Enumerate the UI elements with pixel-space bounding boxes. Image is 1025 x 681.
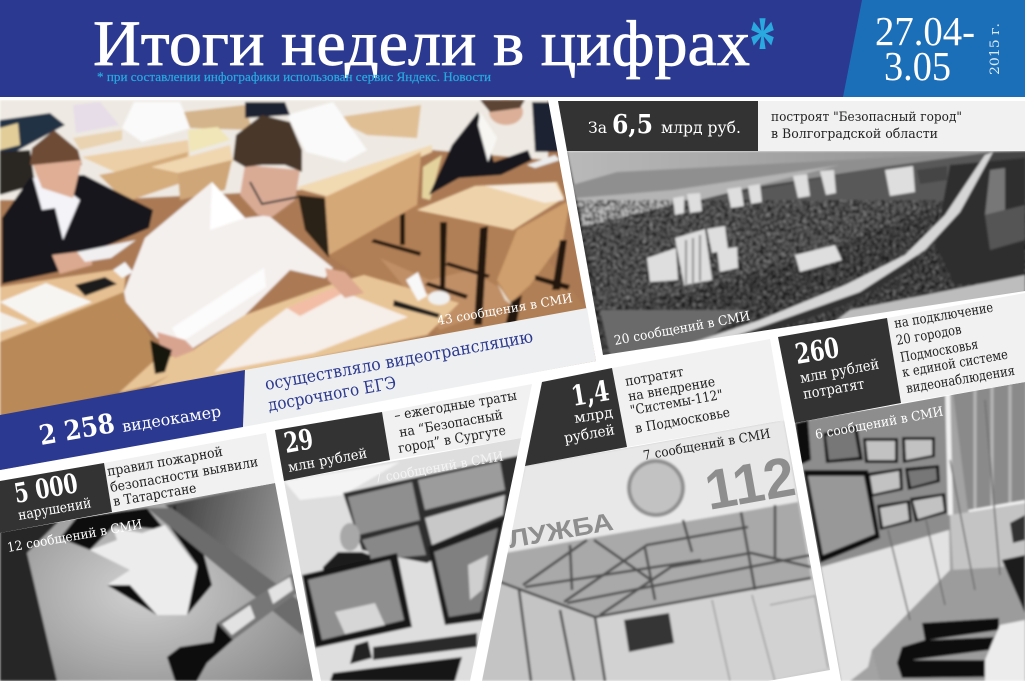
Tatarstan description: правил пожарной [106,444,224,480]
panel: exam photo [0,99,600,475]
floor [518,270,566,300]
left student [2,175,153,284]
Surgut description: на “Безопасный [398,407,504,441]
System 112 description: в Подмосковье [634,405,731,437]
stat: 6.5 billion: За [588,118,607,137]
panel: System 112 [480,339,840,681]
Volgograd description: построят "Безопасный город" [771,110,962,125]
date range: 3.05 [884,43,951,89]
band description: досрочного ЕГЭ [266,373,398,416]
panel: blue stat band [0,308,596,470]
stat: 5000 violations: нарушений [17,495,93,524]
city photo [560,151,1025,361]
Surgut description: город” в Сургуте [397,423,507,457]
title asterisk: * [749,0,776,90]
stat: 29 million [281,422,368,476]
Tatarstan description: в Татарстане [112,480,198,510]
label on photo: 112 [700,444,800,522]
source note: * при составлении инфографики использован сервис Яндекс. Новости [97,70,491,84]
back row [0,113,65,155]
Volgograd description [771,110,962,142]
System 112 description: на внедрение [627,374,716,405]
stat: 1.4 billion [563,374,616,447]
Surgut description [393,388,518,457]
Surgut description: – ежегодные траты [393,388,518,424]
Tatarstan description [106,444,259,510]
band description [263,327,535,416]
Volgograd description: в Волгоградской области [771,127,938,142]
media count: exam: 43 сообщения в СМИ [436,290,574,328]
System 112 description [624,364,731,437]
stat: 29 million: 29 [281,422,316,460]
stat: 6.5 billion [588,110,741,140]
stat: 1.4 billion: млрд [573,405,614,427]
fire badge photo [0,480,320,681]
middle desk [295,145,432,197]
title: Итоги недели в цифрах [93,8,750,80]
stat: 1.4 billion: рублей [563,422,616,447]
front desk [119,275,459,393]
center student [124,182,333,352]
System 112 description: потратят [624,364,685,390]
right desk [417,182,564,230]
stat: 260 million: потратят [802,376,866,403]
media count: Tatarstan: 12 сообщений в СМИ [6,517,144,556]
panel: Tatarstan fire safety [0,433,320,681]
header band [0,0,1025,97]
Moscow region description: Подмосковья [899,336,979,366]
stat: camera count [37,402,222,452]
media count: Moscow region: 6 сообщений в СМИ [814,404,945,443]
Moscow region description: 20 городов [895,322,963,349]
Moscow region description: к единой системе [901,347,1009,381]
monitoring room photo [790,380,1025,681]
stat: camera count: 2 258 [37,408,117,452]
System 112 description: "Системы-112" [629,387,724,419]
stat: 29 million: млн рублей [287,446,368,476]
stat: 260 million [793,331,880,403]
stat: camera count: видеокамер [121,402,222,436]
control room photo [280,435,525,681]
stat: 5000 violations: 5 000 [12,468,80,510]
left desk [0,268,126,342]
Moscow region description [893,300,1016,397]
media count: Volgograd: 20 сообщений в СМИ [613,309,751,349]
media count: Surgut: 7 сообщений в СМИ [373,449,505,487]
panel: Surgut [275,384,532,681]
stat: 5000 violations [12,468,93,524]
right student [422,155,442,200]
Moscow region description: на подключение [893,300,994,332]
year: 2015 г. [988,23,1003,75]
Tatarstan description: безопасности выявили [109,454,259,496]
stat: 6.5 billion: 6,5 [612,110,653,140]
stat: 6.5 billion: млрд руб. [661,118,741,137]
label on photo: ЛУЖБА [506,508,615,554]
stat: 1.4 billion: 1,4 [569,374,612,413]
date range: 27.04- [875,8,975,54]
service 112 photo [480,420,840,681]
stat: 260 million: млн рублей [799,357,880,387]
label on photo [510,458,796,548]
date range [875,8,975,89]
band description: осуществляло видеотрансляцию [263,327,535,395]
media count: System 112: 7 сообщений в СМИ [642,427,772,464]
panel: Volgograd [558,101,1025,361]
panel: Moscow region video surveillance [778,293,1025,681]
stat: 260 million: 260 [793,331,842,371]
